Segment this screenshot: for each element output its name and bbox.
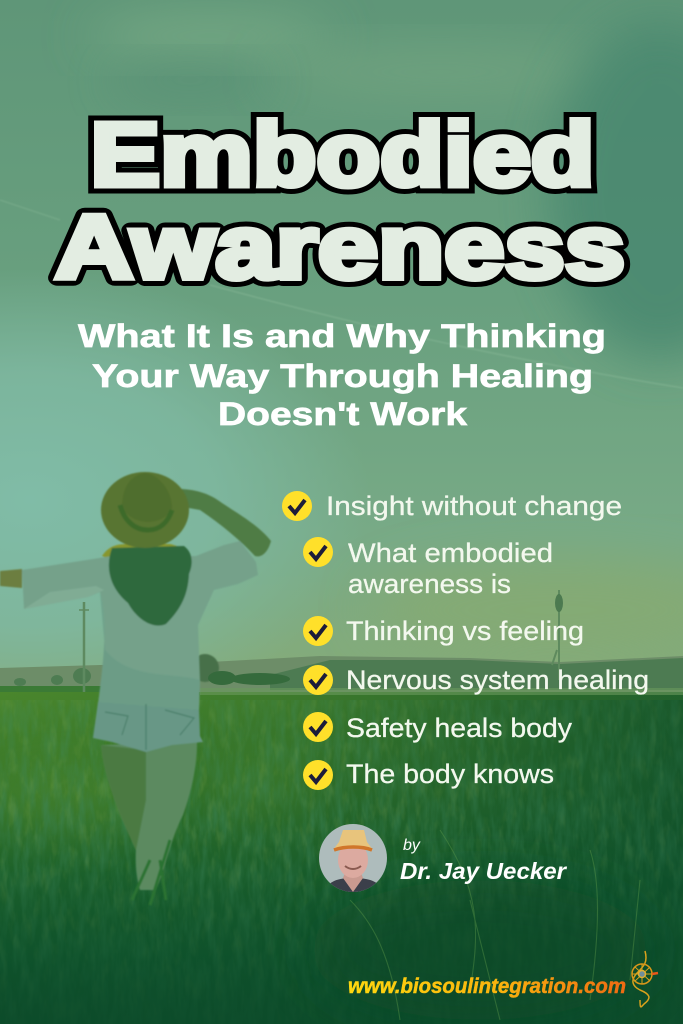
- title line: Awareness: Awareness: [55, 198, 625, 298]
- icon: biosoul spiral eye logo: [632, 951, 658, 1007]
- hair glow: [102, 544, 190, 568]
- title: [55, 106, 625, 298]
- subtitle: Your Way Through Healing: [92, 358, 593, 394]
- title line: Awareness: Awareness: [55, 198, 625, 298]
- left arm: [0, 569, 22, 588]
- background: grass field: [0, 688, 683, 1024]
- background: distant hills and tree line: [0, 602, 683, 700]
- item: What embodied awareness is: awareness is: [348, 569, 511, 599]
- subtitle: [78, 318, 606, 432]
- title line: Embodied: Embodied: [90, 106, 594, 206]
- background: sky: [0, 0, 683, 670]
- subtitle: What It Is and Why Thinking: [78, 318, 606, 354]
- item: The body knows: The body knows: [346, 759, 554, 789]
- item: What embodied awareness is: What embodied: [348, 538, 553, 568]
- subtitle: Doesn't Work: [218, 396, 467, 432]
- item: Nervous system healing: Nervous system healing: [346, 665, 649, 695]
- title line: Embodied: Embodied: [90, 106, 594, 206]
- author byline: by: [403, 837, 421, 854]
- author portrait: [319, 824, 387, 892]
- hat: [101, 472, 189, 548]
- raised arm: [172, 489, 271, 556]
- author byline: Dr. Jay Uecker: [400, 858, 567, 884]
- grass over feet: [132, 840, 170, 905]
- blouse: [22, 541, 258, 710]
- item: Insight without change: Insight without change: [326, 491, 622, 521]
- checklist: [282, 491, 649, 790]
- author byline: [400, 837, 567, 884]
- website url: www.biosoulintegration.com: [348, 975, 626, 998]
- item: Thinking vs feeling: Thinking vs feeling: [346, 616, 584, 646]
- item: Safety heals body: Safety heals body: [346, 713, 573, 743]
- hair: [109, 546, 192, 626]
- photo: woman seen from behind: [0, 472, 271, 905]
- legs: [101, 742, 197, 890]
- denim shorts: [93, 702, 203, 752]
- item: What embodied awareness is: [303, 537, 553, 599]
- background: thistle stem: [552, 590, 563, 680]
